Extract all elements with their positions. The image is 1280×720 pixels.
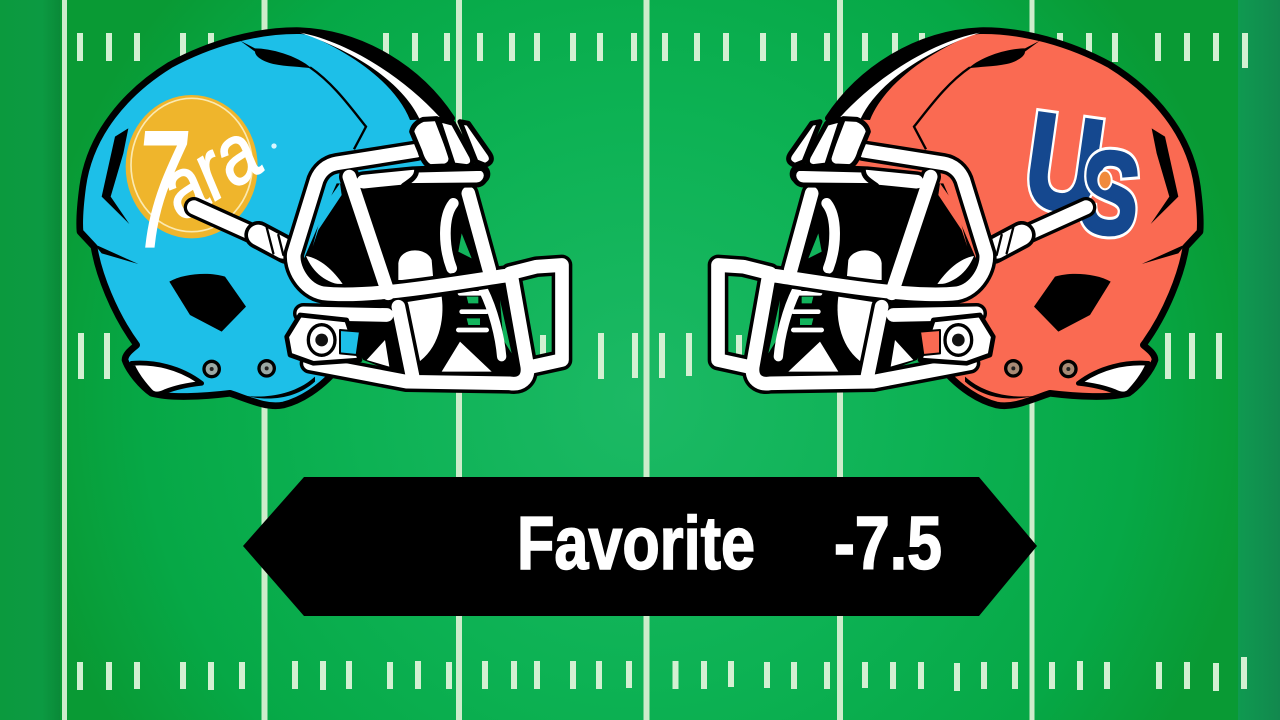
logo: US: U (1017, 84, 1112, 242)
banner: favorite spread (243, 477, 1037, 616)
opening accents (313, 163, 417, 247)
shell contour marks (94, 41, 366, 399)
right helmet: coral (718, 30, 1200, 406)
banner shape (243, 477, 1037, 616)
inner padding (306, 250, 492, 372)
jaw clip (920, 315, 993, 363)
chin strap bolt (993, 207, 1086, 255)
shell contour marks (914, 41, 1186, 399)
shell (828, 31, 1200, 406)
ear hole (169, 274, 246, 332)
opening accents (863, 163, 967, 247)
inner cage lines (778, 203, 835, 357)
crown stripe (297, 30, 453, 120)
logo: yellow disc: 7 (135, 97, 188, 283)
ear hole (1034, 274, 1111, 332)
chin guard (1078, 363, 1148, 394)
face mask frame (294, 151, 562, 384)
yard lines (64, 0, 1032, 720)
crown stripe (827, 30, 983, 120)
screws (202, 359, 276, 378)
logo: yellow disc (126, 95, 277, 283)
top mount clips (789, 119, 877, 186)
jaw clip (287, 315, 360, 363)
chin strap bolt (194, 207, 287, 255)
top mount clips (403, 119, 491, 186)
green gaps (458, 233, 512, 353)
face opening (758, 183, 977, 378)
logo: yellow disc: ara (142, 105, 276, 237)
chin guard (132, 363, 202, 394)
left helmet: blue (80, 30, 562, 406)
green gaps (768, 233, 822, 353)
logo: US: S (1074, 125, 1146, 261)
logo: US: U (1017, 84, 1112, 242)
face mask frame (718, 151, 986, 384)
label: Favorite: Favorite (517, 501, 755, 585)
face opening (303, 183, 522, 378)
screws (1004, 359, 1078, 378)
inner padding (788, 250, 974, 372)
shell (80, 31, 452, 406)
inner cage lines (445, 203, 502, 357)
value: -7.5: -7.5 (834, 501, 942, 585)
logo: US: S (1074, 125, 1146, 261)
